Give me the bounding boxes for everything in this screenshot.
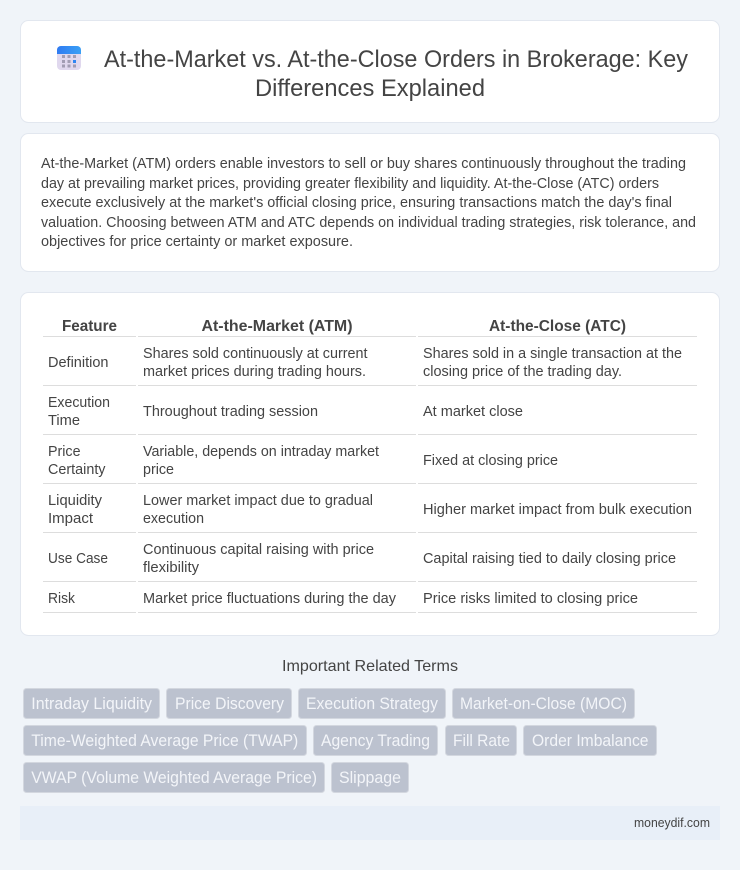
tag: order imbalance — [524, 726, 656, 756]
row: liquidity impact: execution — [143, 511, 204, 527]
tag: execution strategy: Execution Strategy — [306, 695, 439, 713]
row: price certainty: Variable, depends on intraday market — [143, 444, 379, 460]
row: use case: Capital raising tied to daily closing price — [423, 551, 676, 567]
row: definition: Shares sold in a single transaction at the — [423, 346, 682, 362]
table header: Feature — [62, 318, 117, 335]
tag: intraday liquidity — [24, 688, 160, 718]
icon: calendar — [57, 46, 81, 70]
table header: At-the-Market (ATM) — [202, 318, 352, 335]
row: liquidity impact: Impact — [48, 511, 93, 527]
tag: market-on-close: Market-on-Close (MOC) — [460, 695, 627, 713]
tag: execution strategy — [298, 688, 446, 718]
title: Differences Explained — [255, 75, 485, 102]
tag: twap — [24, 726, 306, 756]
row: price certainty — [48, 444, 558, 478]
row: price certainty: Fixed at closing price — [423, 453, 558, 469]
tag: agency trading — [314, 726, 438, 756]
tag: price discovery: Price Discovery — [175, 695, 285, 713]
panel: summary text: valuation. Choosing between ATM and ATC depends on individual trading strategies, risk tolerance, and — [41, 215, 696, 231]
row: liquidity impact: Lower market impact due to gradual — [143, 493, 373, 509]
footer: moneydif.com — [634, 816, 710, 830]
title: At-the-Market vs. At-the-Close Orders in Brokerage: Key — [104, 46, 688, 73]
row: use case: Use Case — [48, 551, 108, 567]
row: risk: Price risks limited to closing price — [423, 591, 638, 607]
row: execution time: Time — [48, 413, 80, 429]
row: use case — [48, 542, 676, 576]
panel: title card — [20, 20, 720, 122]
tag: vwap — [24, 762, 324, 792]
row: liquidity impact: Liquidity — [48, 493, 103, 509]
row: execution time — [48, 395, 523, 429]
row: price certainty: Certainty — [48, 462, 106, 478]
row: liquidity impact: Higher market impact from bulk execution — [423, 502, 692, 518]
panel: comparison table — [20, 292, 720, 636]
table header — [62, 318, 626, 335]
row: risk: Market price fluctuations during the day — [143, 591, 397, 607]
row: risk — [48, 591, 638, 607]
row: execution time: Throughout trading session — [143, 404, 318, 420]
row: definition: Definition — [48, 355, 109, 371]
tag: slippage — [332, 762, 408, 792]
row: execution time: At market close — [423, 404, 523, 420]
tag: twap: Time-Weighted Average Price (TWAP) — [31, 732, 298, 750]
heading: important related terms: Important Related Terms — [282, 658, 458, 675]
panel: summary text: At-the-Market (ATM) orders enable investors to sell or buy shares continuously throughout the trading — [41, 156, 686, 172]
tag: vwap: VWAP (Volume Weighted Average Price) — [31, 769, 317, 787]
tag: price discovery — [166, 688, 292, 718]
row: definition: closing price of the trading day. — [423, 364, 622, 380]
tag: agency trading: Agency Trading — [321, 732, 430, 750]
panel: summary text — [20, 134, 720, 272]
row: execution time: Execution — [48, 395, 110, 411]
tag: order imbalance: Order Imbalance — [532, 732, 648, 750]
tag: slippage: Slippage — [339, 769, 401, 787]
row: liquidity impact — [48, 493, 692, 527]
row: price certainty: Price — [48, 444, 81, 460]
tag: fill rate: Fill Rate — [453, 732, 510, 750]
row: price certainty: price — [143, 462, 174, 478]
row: definition: market prices during trading hours. — [143, 364, 366, 380]
row: definition — [48, 346, 682, 380]
panel: summary text: day at prevailing market prices, providing greater flexibility and liquidity. At-the-Close (ATC) orders — [41, 176, 659, 192]
tag: fill rate — [446, 726, 516, 756]
row: use case: Continuous capital raising with price — [143, 542, 374, 558]
panel: summary text: objectives for price certainty or market exposure. — [41, 234, 353, 250]
row: definition: Shares sold continuously at current — [143, 346, 368, 362]
tag: intraday liquidity: Intraday Liquidity — [31, 695, 153, 713]
panel: summary text: execute exclusively at the market's official closing price, ensuring transactions match the day's final — [41, 195, 672, 211]
footer — [20, 806, 720, 840]
table header: At-the-Close (ATC) — [489, 318, 626, 335]
title — [104, 46, 688, 102]
related term tags — [24, 688, 656, 792]
tag: market-on-close — [452, 688, 634, 718]
row: risk: Risk — [48, 591, 76, 607]
row: use case: flexibility — [143, 560, 200, 576]
